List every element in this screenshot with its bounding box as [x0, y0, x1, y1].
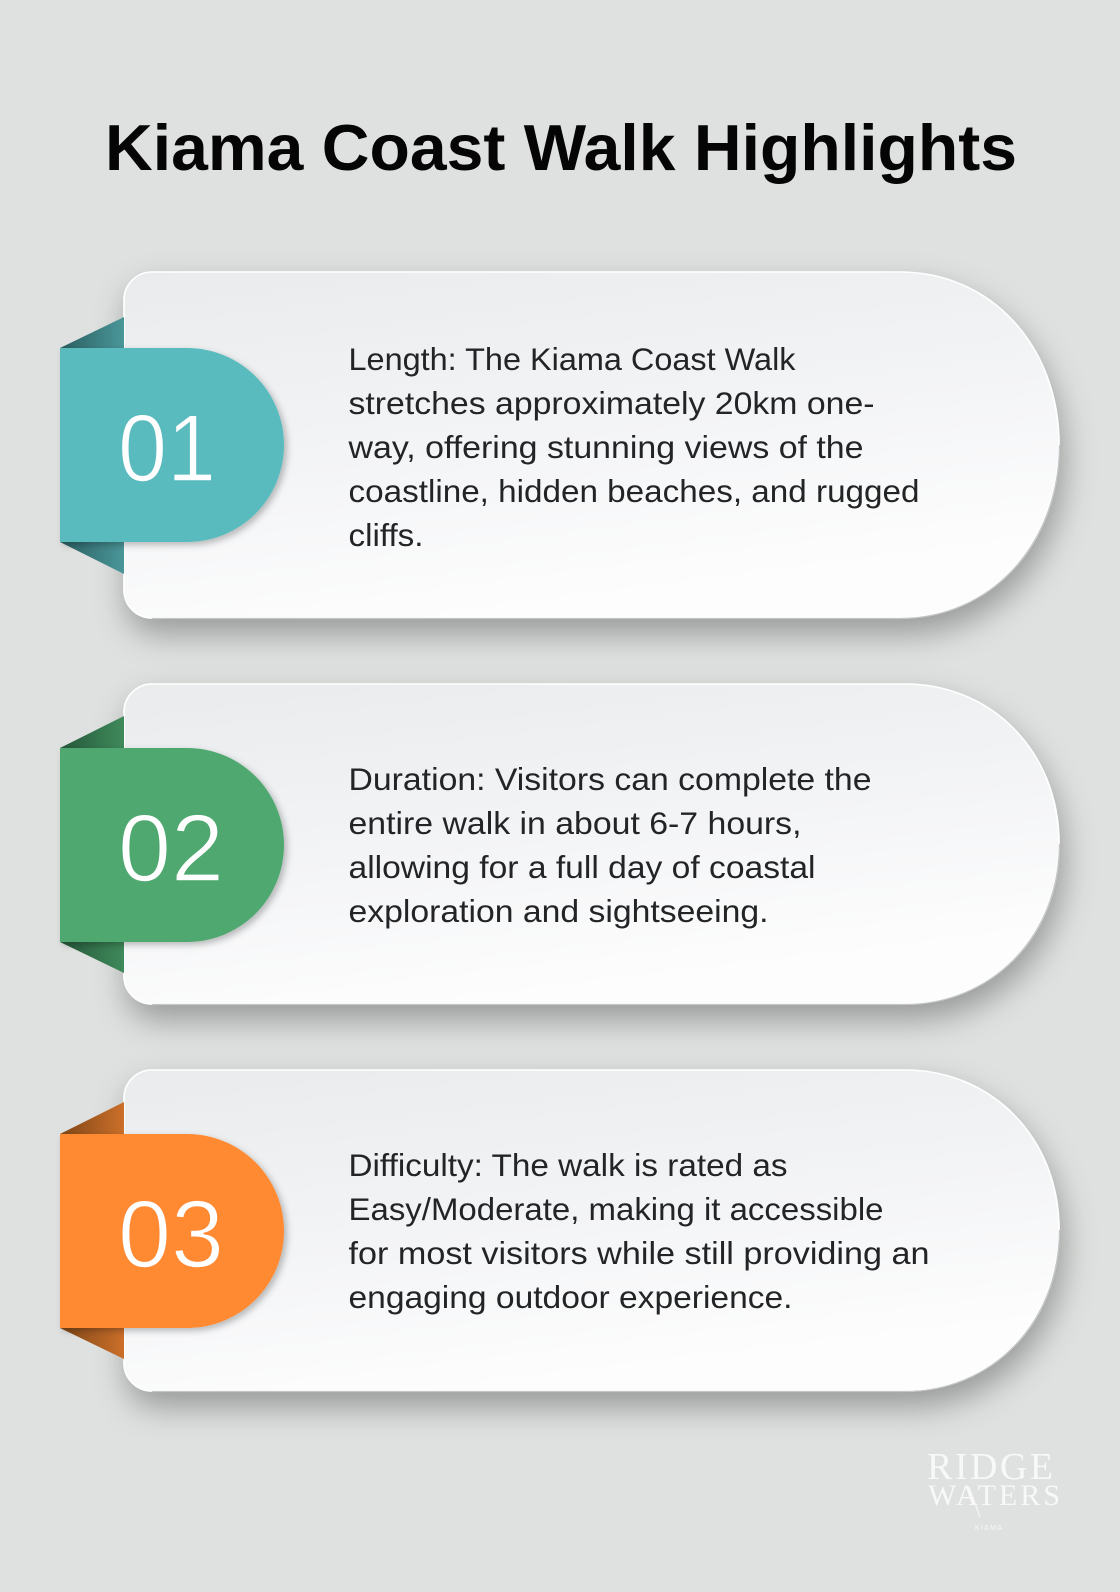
description 1: cliffs. [348, 517, 424, 553]
number 02: 02 [118, 795, 224, 902]
description 3: Easy/Moderate, making it accessible [348, 1191, 884, 1227]
description 2: exploration and sightseeing. [348, 893, 768, 929]
logo: Ridge Waters Kiama: RIDGE [927, 1446, 1053, 1488]
ribbon fold top 2 [60, 716, 124, 748]
number 03: 03 [118, 1181, 224, 1288]
logo: Ridge Waters Kiama [927, 1446, 1060, 1532]
ribbon fold bottom 2 [60, 942, 124, 973]
description 2: allowing for a full day of coastal [348, 849, 816, 885]
description 3: for most visitors while still providing an [348, 1235, 930, 1271]
description 3: engaging outdoor experience. [348, 1279, 792, 1315]
number badge 1 [60, 348, 284, 542]
description 1: way, offering stunning views of the [347, 429, 864, 465]
description 2 [348, 761, 872, 929]
description 2: Duration: Visitors can complete the [348, 761, 872, 797]
card background 1 [124, 272, 1059, 618]
title: Kiama Coast Walk Highlights [105, 111, 1017, 184]
description 3: Difficulty: The walk is rated as [348, 1147, 788, 1183]
logo: Ridge Waters Kiama: WATERS [928, 1479, 1060, 1512]
number 01: 01 [118, 395, 216, 502]
panel: length [60, 272, 1060, 618]
panel: duration [60, 684, 1060, 1004]
description 1 [347, 341, 920, 553]
ribbon fold bottom 1 [60, 542, 124, 574]
ribbon fold top 3 [60, 1102, 124, 1134]
ribbon fold bottom 3 [60, 1328, 124, 1359]
description 1: stretches approximately 20km one- [348, 385, 874, 421]
logo: Ridge Waters Kiama: KIAMA [975, 1525, 1002, 1532]
description 1: coastline, hidden beaches, and rugged [348, 473, 920, 509]
description 2: entire walk in about 6-7 hours, [348, 805, 802, 841]
number badge 2 [60, 748, 284, 942]
card background 3 [124, 1070, 1059, 1391]
ribbon fold top 1 [60, 317, 124, 348]
number badge 3 [60, 1134, 284, 1328]
panel: difficulty [60, 1070, 1060, 1392]
description 1: Length: The Kiama Coast Walk [348, 341, 796, 377]
card background 2 [124, 684, 1059, 1004]
description 3 [348, 1147, 930, 1315]
